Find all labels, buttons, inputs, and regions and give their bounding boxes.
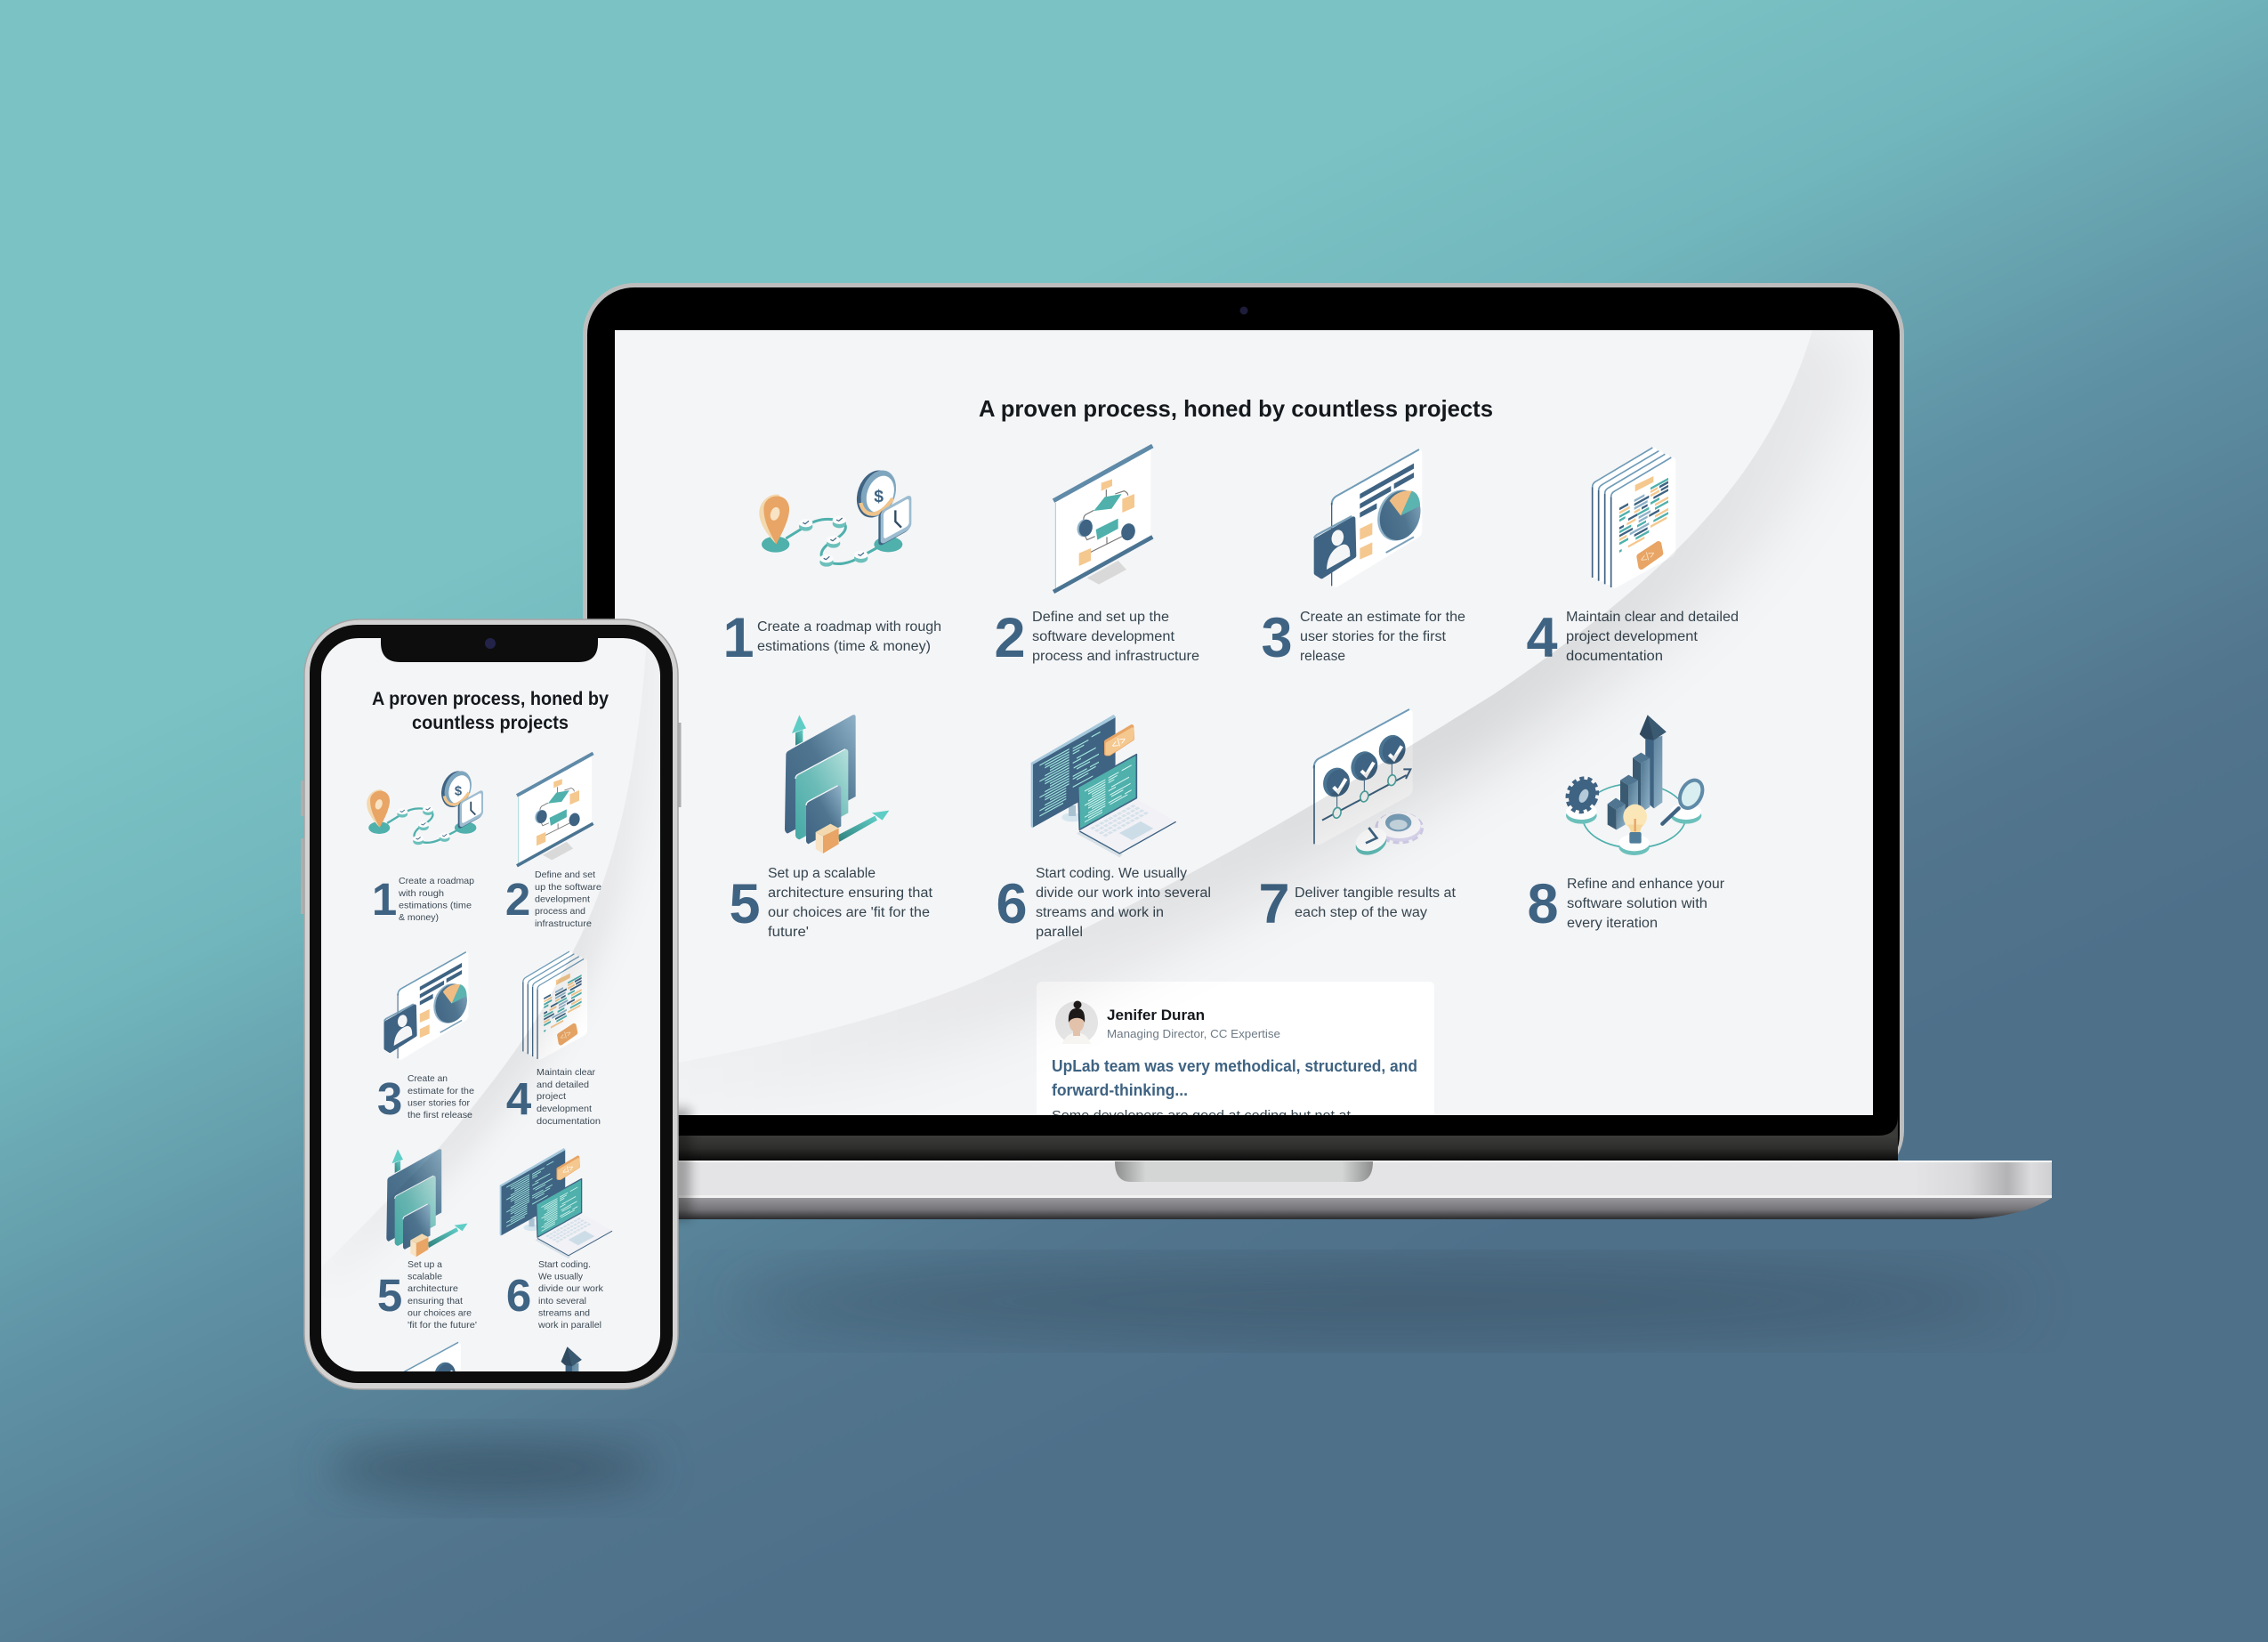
phone step 6 text: work in parallel [537, 1320, 601, 1331]
phone step 1 text: estimations (time [399, 901, 472, 911]
phone step 4 text: development [537, 1104, 592, 1114]
icon: growth chart [1562, 715, 1707, 855]
phone step 3 [377, 951, 474, 1124]
step 8 text [1567, 877, 1724, 931]
icon: flowchart board [1053, 446, 1152, 592]
phone step 4 [506, 951, 601, 1127]
step 7 text [1295, 886, 1457, 920]
phone page title [372, 689, 609, 733]
laptop camera [1240, 306, 1247, 315]
phone step 1 text: with rough [398, 888, 444, 899]
icon: documentation pages [523, 951, 587, 1060]
step 3 text: Create an estimate for the [1300, 610, 1465, 625]
phone camera [485, 638, 496, 649]
phone step 6 [500, 1148, 612, 1331]
phone step 1 text [398, 876, 474, 923]
step 8 text: Refine and enhance your [1567, 877, 1724, 892]
phone step 6 text: Start coding. [538, 1259, 591, 1270]
icon: growth chart, clipped [501, 1347, 613, 1455]
step 3 text: user stories for the first [1300, 629, 1447, 644]
icon: flowchart board [517, 753, 593, 866]
number 2: 2 [994, 607, 1026, 669]
phone side buttons [301, 723, 682, 914]
phone step 3 text: the first release [408, 1110, 472, 1120]
phone step 5 text: architecture [408, 1283, 458, 1294]
laptop screen [615, 330, 1873, 1133]
step 3 text [1300, 610, 1465, 664]
phone step 3 text: estimate for the [408, 1086, 474, 1096]
step 2 [994, 446, 1199, 669]
phone step 5 text: our choices are [408, 1308, 472, 1319]
step 7 [1258, 709, 1457, 935]
icon: layered architecture [785, 715, 889, 853]
phone step 2 text: development [535, 894, 590, 905]
phone step 6 text: streams and [538, 1308, 590, 1319]
laptop page title: A proven process, honed by countless projects [979, 395, 1493, 422]
avatar [1055, 1000, 1098, 1044]
number 8: 8 [1527, 873, 1559, 935]
phone step 1 text: & money) [399, 912, 439, 923]
reviewer name: Jenifer Duran [1107, 1007, 1205, 1023]
number 5: 5 [729, 873, 761, 935]
step 4 text: project development [1566, 629, 1699, 644]
phone step 4 text: Maintain clear [537, 1067, 595, 1078]
phone shadow [327, 1444, 657, 1493]
phone step 5 [377, 1149, 477, 1331]
step 5 text [768, 866, 933, 940]
step 7 text: each step of the way [1295, 905, 1427, 920]
number 3: 3 [1261, 607, 1293, 669]
number 4: 4 [1526, 607, 1558, 669]
phone page title: A proven process, honed by [372, 689, 609, 709]
number 1: 1 [722, 607, 755, 669]
review headline: UpLab team was very methodical, structured, and [1052, 1057, 1417, 1075]
phone notch [381, 638, 598, 662]
icon: documentation pages [1593, 448, 1675, 588]
icon: estimate board [384, 951, 472, 1060]
phone step 3 text [408, 1073, 474, 1120]
phone step 6 text: We usually [538, 1272, 584, 1282]
step 5 text: future' [768, 925, 809, 940]
phone page title: countless projects [412, 713, 569, 733]
number 6: 6 [506, 1270, 531, 1321]
phone side shadow on laptop [669, 1108, 690, 1219]
phone step 3 text: user stories for [408, 1098, 470, 1109]
number 7: 7 [1258, 873, 1290, 935]
icon: milestone board [1314, 709, 1421, 860]
phone step 2 text: infrastructure [535, 918, 592, 929]
step 7 text: Deliver tangible results at [1295, 886, 1457, 901]
step 5 text: Set up a scalable [768, 866, 876, 881]
icon: roadmap [367, 767, 483, 845]
review headline [1052, 1057, 1417, 1099]
phone step 3 text: Create an [408, 1073, 448, 1084]
step 5 text: our choices are 'fit for the [768, 905, 930, 920]
phone step 5 text [408, 1259, 477, 1331]
step 5 text: architecture ensuring that [768, 886, 933, 901]
step 4 [1526, 448, 1739, 669]
laptop shadow [725, 1269, 2024, 1333]
phone step 4 text: and detailed [537, 1080, 589, 1090]
laptop [434, 283, 2052, 1219]
step 6 text: divide our work into several [1036, 886, 1211, 901]
step 2 text: Define and set up the [1032, 610, 1169, 625]
testimonial card [1037, 982, 1434, 1133]
step 1 text: estimations (time & money) [757, 639, 931, 654]
step 2 text: process and infrastructure [1032, 649, 1199, 664]
phone step 2 text: Define and set [535, 870, 595, 880]
step 6 text: parallel [1036, 925, 1083, 940]
step 3 text: release [1300, 649, 1345, 664]
phone step 1 [367, 767, 483, 925]
number 6: 6 [996, 873, 1028, 935]
phone step 2 text [535, 870, 601, 929]
phone step 5 text: scalable [408, 1272, 442, 1282]
icon: coding monitor and laptop [1031, 715, 1176, 857]
phone step 2 text: up the software [535, 882, 601, 893]
phone step 5 text: 'fit for the future' [408, 1320, 477, 1331]
number 5: 5 [377, 1270, 402, 1321]
phone step 5 text: Set up a [408, 1259, 442, 1270]
step 4 text: documentation [1566, 649, 1663, 664]
step 4 text: Maintain clear and detailed [1566, 610, 1739, 625]
step 4 text [1566, 610, 1739, 664]
phone step 6 text: divide our work [538, 1283, 604, 1294]
review headline: forward-thinking... [1052, 1081, 1188, 1099]
number 4: 4 [506, 1073, 532, 1124]
number 1: 1 [372, 874, 397, 925]
reviewer role: Managing Director, CC Expertise [1107, 1027, 1280, 1040]
step 1 text: Create a roadmap with rough [757, 619, 941, 635]
review body: Some developers are good at coding but not at [1052, 1108, 1352, 1123]
phone step 5 text: ensuring that [408, 1296, 463, 1306]
step 6 text [1036, 866, 1211, 940]
step 6 text: Start coding. We usually [1036, 866, 1187, 881]
icon: coding monitor and laptop [500, 1148, 612, 1258]
phone step 6 text [537, 1259, 604, 1331]
phone step 4 text: documentation [537, 1116, 601, 1127]
phone [301, 619, 682, 1459]
icon: roadmap [759, 465, 911, 567]
laptop lid frame [583, 283, 1904, 1182]
laptop base [434, 1161, 2052, 1219]
phone step 2 text: process and [535, 906, 585, 917]
trackpad notch [1115, 1161, 1373, 1182]
phone step 6 text: into several [538, 1296, 586, 1306]
step 8 text: software solution with [1567, 896, 1707, 911]
step 2 text [1032, 610, 1199, 664]
phone body [304, 619, 678, 1389]
phone step 1 text: Create a roadmap [399, 876, 474, 886]
step 1 text [757, 619, 941, 654]
icon: milestone board, clipped [384, 1342, 467, 1459]
icon: estimate board [1314, 449, 1427, 587]
step 8 text: every iteration [1567, 916, 1658, 931]
step 8 [1527, 715, 1724, 935]
phone step 4 text: project [537, 1091, 566, 1102]
number 2: 2 [505, 874, 530, 925]
phone screen [316, 638, 660, 1459]
step 5 [729, 715, 933, 940]
step 2 text: software development [1032, 629, 1175, 644]
phone step 4 text [537, 1067, 601, 1127]
icon: layered architecture [386, 1149, 467, 1257]
step 1 [726, 470, 940, 657]
step 6 [996, 715, 1211, 940]
step 6 text: streams and work in [1036, 905, 1164, 920]
step 3 [1261, 449, 1465, 669]
phone step 2 [505, 753, 601, 929]
number 3: 3 [377, 1073, 402, 1124]
